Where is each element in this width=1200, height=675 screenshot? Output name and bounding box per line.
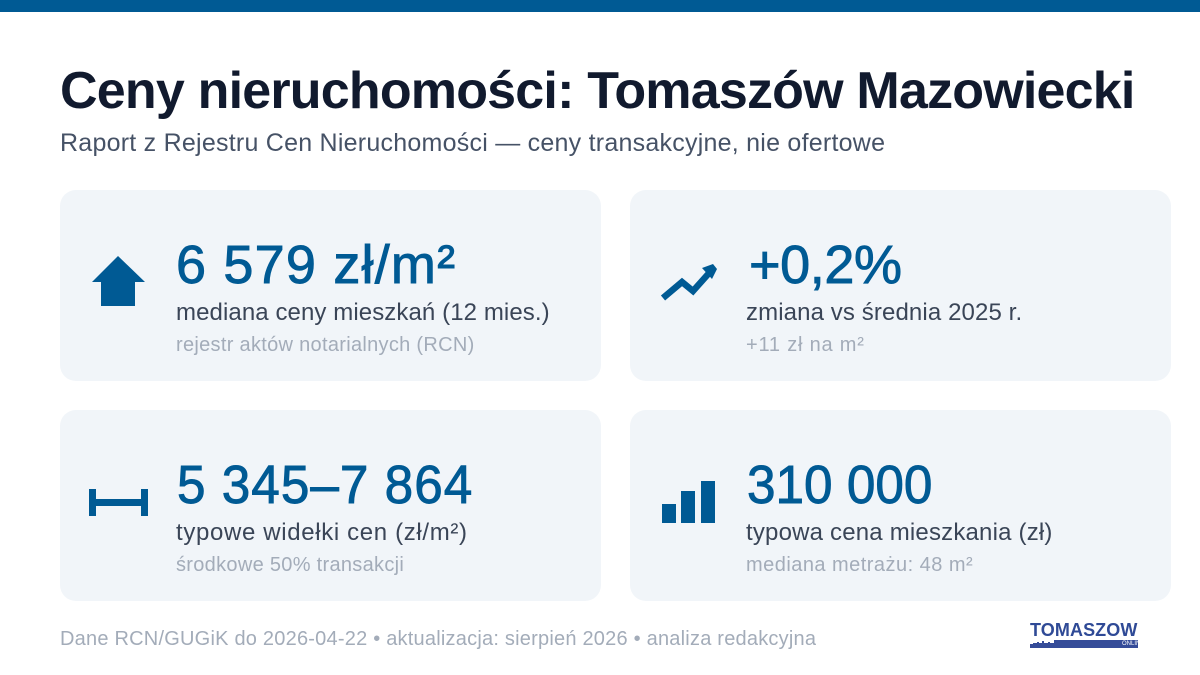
icon: bar chart [662,481,715,523]
icon: house [92,256,145,306]
footer source line: Dane RCN/GUGiK do 2026-04-22 • aktualizacja: sierpień 2026 • analiza redakcyjna [60,628,816,650]
note: price range: środkowe 50% transakcji [176,554,404,576]
logo skyline [1030,640,1054,644]
label: typical price: typowa cena mieszkania (zł) [746,519,1053,546]
panel: price range [60,410,601,601]
panel: change [630,190,1171,381]
icon: range bracket [89,489,148,516]
logo: Tomaszow Online [1030,620,1144,648]
label: price range: typowe widełki cen (zł/m²) [176,519,468,546]
panel: typical price [630,410,1171,601]
value: typical price: 310 000 [747,455,932,515]
logo wordmark: TOMASZOW [1030,620,1137,640]
note: typical price: mediana metrażu: 48 m² [746,554,973,576]
logo tag: ONLINE [1122,641,1144,647]
note: median price: rejestr aktów notarialnych (RCN) [176,334,475,356]
icon: trend arrow [661,264,717,300]
note: change: +11 zł na m² [746,334,865,356]
title: Ceny nieruchomości: Tomaszów Mazowiecki [60,62,1135,120]
logo bar [1030,640,1138,648]
subtitle: Raport z Rejestru Cen Nieruchomości — ceny transakcyjne, nie ofertowe [60,129,885,157]
value: price range: 5 345–7 864 [177,455,473,515]
value: change: +0,2% [749,235,902,295]
value: median price: 6 579 zł/m² [176,235,456,295]
label: median price: mediana ceny mieszkań (12 mies.) [176,299,550,326]
panel: median price [60,190,601,381]
label: change: zmiana vs średnia 2025 r. [746,299,1022,326]
top bar [0,0,1200,12]
